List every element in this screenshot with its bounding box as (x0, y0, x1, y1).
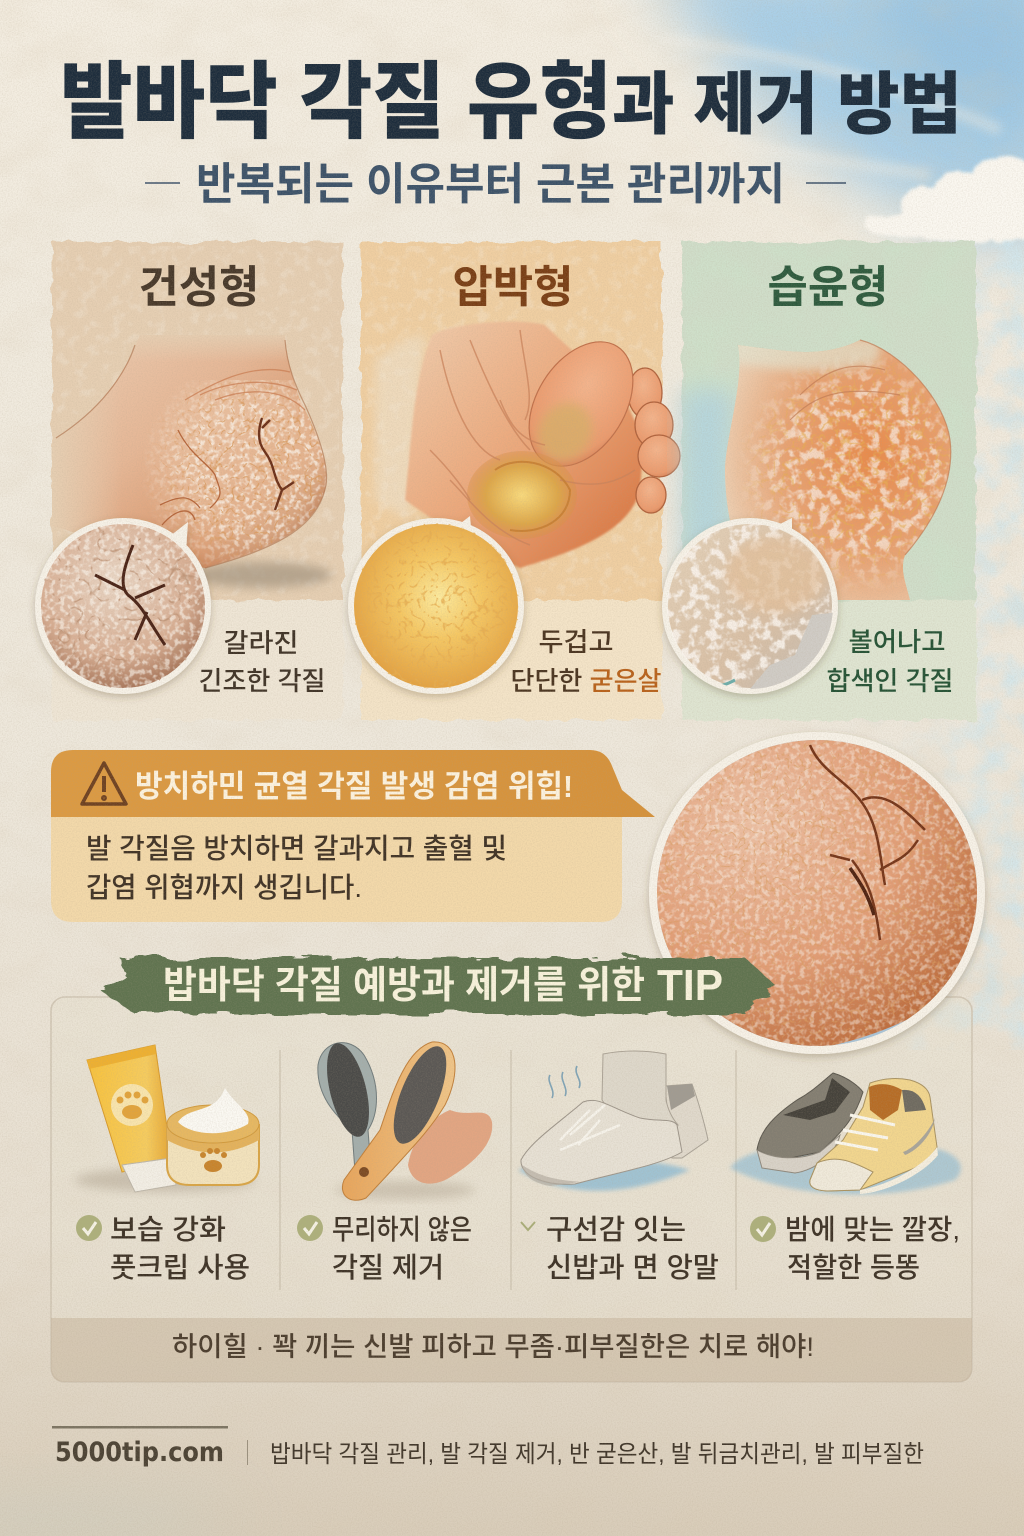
illustration: grey shoe and yellow sneaker (730, 1073, 961, 1194)
caption: 단단한 굳은살 (510, 666, 662, 696)
icon: warning triangle (82, 763, 126, 804)
tip text (110, 1214, 250, 1283)
caption (826, 627, 954, 696)
illustration: foot files and pumice (318, 1039, 492, 1200)
heading: 건성형 (138, 263, 260, 312)
check icon (521, 1222, 535, 1230)
illustration: tube and jar (75, 1045, 259, 1192)
tip text: 무리하지 않은 (332, 1214, 472, 1245)
zoom circle: peeling skin (665, 518, 840, 700)
title: 발바닥 각질 유형 (60, 55, 612, 149)
tip 1: cream (75, 1045, 259, 1283)
panel: tips (51, 997, 972, 1382)
caption (198, 628, 326, 696)
check icon (297, 1215, 323, 1241)
illustration: macerated heel (725, 338, 960, 600)
panel: dry type (38, 242, 343, 720)
illustration: sole with callus (375, 322, 680, 568)
callout: warning (51, 750, 655, 922)
heading: 습윤형 (768, 263, 888, 312)
tip text (546, 1214, 719, 1283)
tip text (332, 1214, 472, 1283)
caption (510, 627, 662, 696)
TIP label: TIP (657, 961, 723, 1010)
tip text: 신밥과 면 앙말 (546, 1252, 719, 1283)
check icon (750, 1216, 776, 1242)
tip text: 밤에 맞는 깔장, (785, 1214, 960, 1245)
site name: 5000tip.com (55, 1437, 224, 1468)
zoom circle: callus (351, 516, 521, 691)
caption: 긴조한 각질 (198, 666, 326, 696)
tip text: 적할한 등똥 (787, 1252, 920, 1283)
bottom note: 하이힐 · 꽉 끼는 신발 피하고 무좀·피부질한은 치로 해야! (172, 1332, 814, 1362)
tip text: 보습 강화 (110, 1214, 226, 1245)
keywords: 밥바닥 각질 관리, 발 각질 제거, 반 굳은산, 발 뒤금치관리, 발 피부질한 (270, 1441, 924, 1468)
heading: 압박형 (452, 263, 574, 312)
zoom circle: dry cracks (38, 521, 208, 691)
banner: tip heading (100, 958, 775, 1014)
callout header (51, 750, 655, 817)
check icon (76, 1215, 102, 1241)
tip 4: fitting shoes (730, 1073, 961, 1283)
warning text: 발 각질음 방치하면 갈과지고 출혈 및 (86, 833, 507, 864)
panel: pressure type (351, 242, 680, 720)
subtitle: 반복되는 이유부터 근본 관리까지 (196, 160, 785, 209)
caption: 갈라진 (224, 628, 298, 658)
tip text (785, 1214, 960, 1283)
warning text (86, 833, 507, 903)
tip text: 풋크립 사용 (110, 1252, 250, 1283)
title: 과 제거 방법 (612, 67, 962, 143)
tip text: 각질 제거 (332, 1252, 444, 1283)
illustration: white sneaker and sock (518, 1051, 708, 1191)
caption: 합색인 각질 (826, 666, 954, 696)
footer (52, 1426, 924, 1468)
tip text: 구선감 잇는 (546, 1214, 686, 1245)
tip 2: tools (297, 1039, 492, 1283)
caption: 두겁고 (538, 627, 614, 657)
panel: moist type (665, 242, 976, 720)
illustration: cracked dry heel (52, 330, 340, 590)
warning text: 갑염 위협까지 생깁니다. (86, 872, 362, 903)
tip 3: cushioned shoes (518, 1051, 719, 1283)
caption: 볼어나고 (848, 627, 946, 657)
large zoom circle: cracked heel (650, 735, 990, 1055)
title (60, 55, 962, 149)
banner: tip heading: 밥바닥 각질 예방과 제거를 위한 (163, 965, 645, 1007)
callout body (51, 817, 622, 922)
warning heading: 방치하민 균열 각질 발생 감염 위힙! (135, 769, 573, 804)
